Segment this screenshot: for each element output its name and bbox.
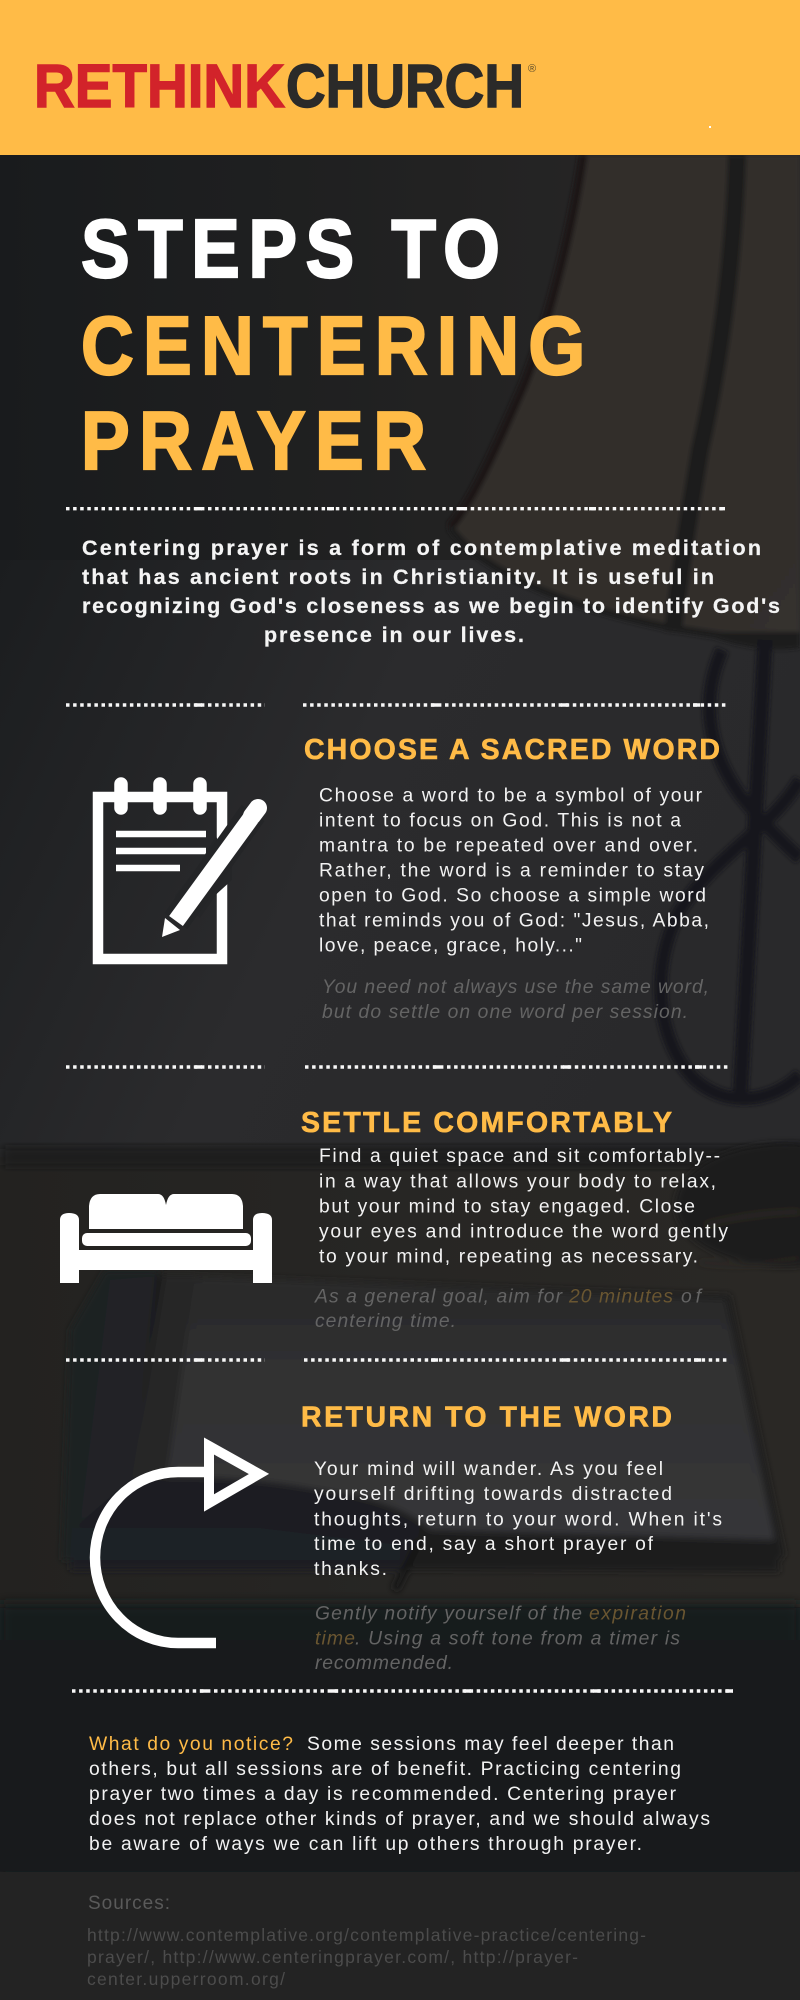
- body text: love, peace, grace, holy...": [319, 936, 582, 956]
- icon: couch: [60, 1194, 272, 1283]
- closing paragraph: what do you notice: others, but all sessions are of benefit. Practicing centering: [89, 1759, 681, 1780]
- body text: intent to focus on God. This is not a: [319, 811, 681, 832]
- intro paragraph: that has ancient roots in Christianity. It is useful in: [82, 565, 714, 589]
- logo: RethinkChurch: RETHINK: [34, 52, 285, 120]
- italic note with highlight: [315, 1604, 686, 1674]
- italic note with highlight: of: [681, 1286, 704, 1307]
- body text: time to end, say a short prayer of: [314, 1534, 654, 1555]
- closing paragraph: what do you notice: [89, 1734, 710, 1855]
- title: PRAYER: [81, 394, 426, 487]
- closing paragraph: what do you notice: Some sessions may feel deeper than: [307, 1734, 674, 1755]
- header band: [0, 0, 800, 155]
- italic note with highlight: 20 minutes: [568, 1286, 673, 1307]
- intro paragraph: [82, 536, 780, 647]
- italic note: [322, 977, 709, 1023]
- body text: your eyes and introduce the word gently: [319, 1222, 728, 1243]
- body text: thoughts, return to your word. When it's: [314, 1509, 722, 1530]
- small white speck: [709, 126, 711, 128]
- italic note with highlight: time: [315, 1628, 355, 1650]
- heading: return to the word: RETURN TO THE WORD: [301, 1402, 672, 1434]
- italic note with highlight: As a general goal, aim for: [314, 1286, 564, 1307]
- intro paragraph: Centering prayer is a form of contemplative meditation: [82, 536, 761, 560]
- closing paragraph: what do you notice: prayer two times a day is recommended. Centering prayer: [89, 1784, 677, 1805]
- body text: yourself drifting towards distracted: [314, 1484, 672, 1505]
- title: CENTERING: [81, 299, 585, 392]
- body text: in a way that allows your body to relax,: [319, 1171, 716, 1192]
- panel: settle comfortably: [60, 1107, 728, 1332]
- source links: center.upperroom.org/: [87, 1969, 285, 1989]
- italic note with highlight: [314, 1286, 704, 1332]
- italic note: but do settle on one word per session.: [322, 1002, 688, 1023]
- closing paragraph: what do you notice: be aware of ways we can lift up others through prayer.: [89, 1834, 642, 1855]
- body text: Choose a word to be a symbol of your: [319, 785, 703, 806]
- body text: [319, 1146, 728, 1267]
- body text: to your mind, repeating as necessary.: [319, 1246, 698, 1267]
- body text: [319, 785, 709, 956]
- title: STEPS TO: [81, 202, 500, 295]
- footer band: [0, 1872, 800, 2000]
- panel: return to the word: [95, 1402, 722, 1674]
- icon: return arrow: [95, 1446, 259, 1643]
- italic note with highlight: Gently notify yourself of the: [315, 1604, 582, 1625]
- source links: http://www.contemplative.org/contemplative-practice/centering-: [87, 1925, 646, 1945]
- body text: open to God. So choose a simple word: [319, 886, 706, 907]
- body text: Your mind will wander. As you feel: [314, 1459, 663, 1480]
- body text: Find a quiet space and sit comfortably--: [319, 1146, 720, 1167]
- heading: choose a sacred word: CHOOSE A SACRED WORD: [304, 734, 720, 766]
- intro paragraph: presence in our lives.: [264, 623, 524, 647]
- logo: RethinkChurch: ®: [528, 63, 536, 75]
- body text: [314, 1459, 722, 1580]
- body text: that reminds you of God: "Jesus, Abba,: [319, 910, 709, 931]
- logo: RethinkChurch: [34, 52, 536, 120]
- title: [81, 202, 585, 487]
- italic note with highlight: expiration: [589, 1604, 686, 1625]
- body text: but your mind to stay engaged. Close: [319, 1196, 695, 1218]
- panel: choose a sacred word: [98, 734, 720, 1023]
- closing paragraph: what do you notice: does not replace other kinds of prayer, and we should always: [89, 1809, 710, 1830]
- body text: thanks.: [314, 1559, 387, 1580]
- heading: settle comfortably: SETTLE COMFORTABLY: [301, 1107, 672, 1139]
- source links: [87, 1925, 646, 1989]
- logo: RethinkChurch: CHURCH: [286, 52, 524, 120]
- source links: prayer/, http://www.centeringprayer.com/, http://prayer-: [87, 1947, 578, 1967]
- closing paragraph: what do you notice: What do you notice?: [89, 1734, 293, 1755]
- italic note with highlight: recommended.: [315, 1653, 453, 1674]
- italic note: You need not always use the same word,: [322, 977, 709, 998]
- icon: notepad and pencil: [98, 784, 258, 959]
- sources heading: Sources:: [88, 1893, 170, 1914]
- italic note with highlight: centering time.: [315, 1311, 456, 1332]
- italic note with highlight: . Using a soft tone from a timer is: [355, 1628, 680, 1650]
- body text: Rather, the word is a reminder to stay: [319, 860, 704, 881]
- body text: mantra to be repeated over and over.: [319, 835, 698, 856]
- intro paragraph: recognizing God's closeness as we begin to identify God's: [82, 594, 780, 618]
